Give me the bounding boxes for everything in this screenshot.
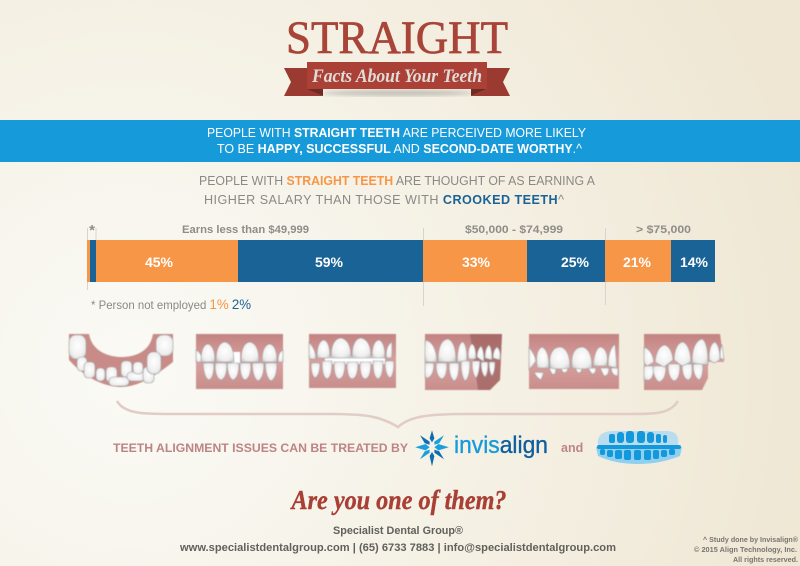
contact details: www.specialistdentalgroup.com | (65) 6733 7883 | info@specialistdentalgroup.com — [179, 542, 616, 554]
teeth photo 5: deep bite — [529, 334, 619, 389]
title: STRAIGHT — [286, 12, 508, 64]
copyright note: © 2015 Align Technology, Inc. — [694, 545, 797, 554]
blue banner: TO BE HAPPY, SUCCESSFUL AND SECOND-DATE WORTHY.^ — [217, 142, 582, 156]
bar values: 14% — [680, 254, 709, 270]
bar values — [145, 254, 709, 270]
teeth photo 2: gaps — [196, 334, 283, 389]
contact details — [179, 525, 616, 554]
teeth photo 3: open bite — [309, 334, 396, 388]
bar values: 21% — [623, 254, 652, 270]
bar values: 33% — [462, 254, 491, 270]
ribbon banner: Facts About Your Teeth — [311, 66, 482, 87]
ribbon banner — [284, 62, 510, 96]
logo: invisalign: invisalign — [454, 432, 548, 459]
subheading — [199, 174, 596, 207]
bar values: 59% — [315, 254, 344, 270]
copyright note: All rights reserved. — [733, 555, 798, 564]
icon: invisalign star — [415, 430, 449, 466]
teeth photo 6: overjet — [644, 334, 724, 390]
treatment line — [113, 430, 682, 466]
category labels — [89, 222, 691, 239]
subheading: HIGHER SALARY THAN THOSE WITH CROOKED TEETH^ — [204, 193, 564, 207]
bar values: 25% — [561, 254, 590, 270]
treatment line: and — [561, 441, 583, 455]
call to action: Are you one of them? — [290, 485, 506, 515]
bar values: 45% — [145, 254, 174, 270]
footnote: person not employed: * Person not employed 1% 2% — [91, 297, 251, 312]
category labels: $50,000 - $74,999 — [465, 224, 563, 236]
category labels: * — [89, 222, 95, 239]
title — [284, 12, 510, 96]
category labels: Earns less than $49,999 — [182, 224, 309, 236]
blue banner — [0, 120, 800, 162]
bars — [87, 240, 715, 282]
teeth photo 4: crossbite — [425, 334, 502, 390]
teeth photo 1: crowded arch — [69, 334, 173, 387]
contact details: Specialist Dental Group® — [333, 525, 463, 537]
curly bracket — [117, 401, 678, 427]
salary bar chart — [87, 222, 715, 312]
category labels: > $75,000 — [636, 224, 691, 236]
copyright note — [694, 535, 798, 564]
treatment line: TEETH ALIGNMENT ISSUES CAN BE TREATED BY — [113, 441, 408, 455]
blue banner: PEOPLE WITH STRAIGHT TEETH ARE PERCEIVED MORE LIKELY — [207, 126, 587, 140]
subheading: PEOPLE WITH STRAIGHT TEETH ARE THOUGHT OF AS EARNING A — [199, 174, 596, 188]
icon: braces — [596, 431, 682, 464]
